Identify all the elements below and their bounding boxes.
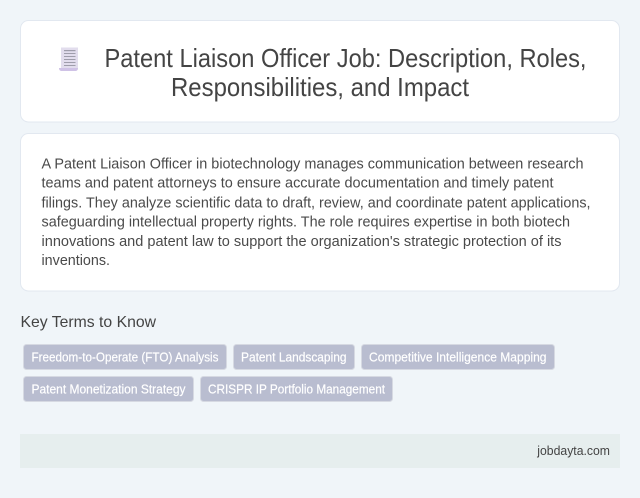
heading: title [104, 43, 586, 102]
footer bar: jobdayta.com [536, 443, 610, 458]
tag: CRISPR IP [200, 376, 392, 402]
text block: description: safeguarding intellectual property rights. The role requires expertise in both biotech [42, 215, 570, 231]
heading: key terms: Key Terms to Know [20, 314, 156, 331]
text block: description: filings. They analyze scientific data to draft, review, and coordinate patent applications, [42, 195, 590, 211]
text block: description: inventions. [42, 253, 110, 269]
panel: description card [20, 134, 620, 291]
heading: title: Responsibilities, and Impact [171, 72, 470, 102]
text block: description: innovations and patent law to support the organization's strategic protection of its [42, 234, 562, 250]
icon: scroll document [59, 48, 78, 71]
tag list: key terms [24, 344, 554, 402]
tag: patent landscaping [234, 344, 354, 370]
tag: patent monetization: Patent Monetization Strategy [32, 381, 186, 396]
tag: FTO analysis: Freedom-to-Operate (FTO) Analysis [32, 349, 218, 364]
tag: competitive intelligence: Competitive Intelligence Mapping [369, 349, 546, 364]
tag: FTO analysis [24, 344, 226, 370]
heading: title: Patent Liaison Officer Job: Description, Roles, [104, 43, 586, 73]
tag: patent landscaping: Patent Landscaping [241, 349, 346, 364]
text block: description [42, 156, 590, 269]
footer bar [20, 434, 620, 468]
panel: title card [20, 20, 620, 122]
tag: CRISPR IP: CRISPR IP Portfolio Management [208, 381, 385, 396]
tag: competitive intelligence [362, 344, 554, 370]
text block: description: A Patent Liaison Officer in biotechnology manages communication between research [42, 156, 584, 172]
tag: patent monetization [24, 376, 194, 402]
text block: description: teams and patent attorneys to ensure accurate documentation and timely patent [42, 175, 554, 191]
